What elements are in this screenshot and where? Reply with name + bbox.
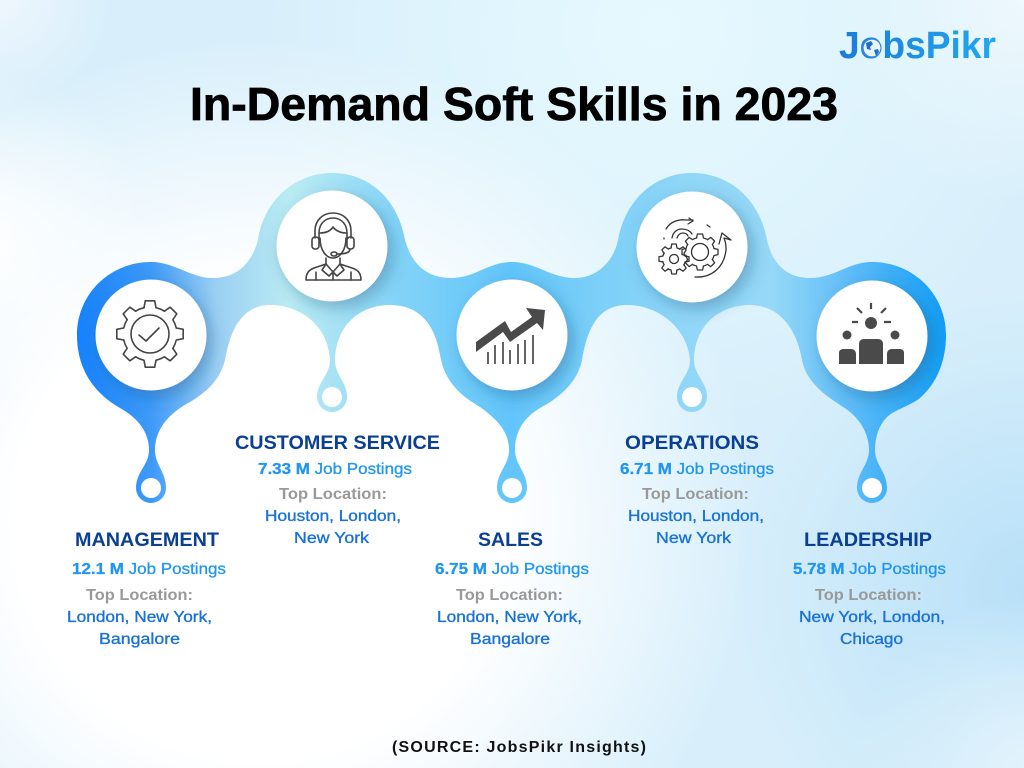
icon: customer service agent <box>306 213 361 280</box>
label: leadership: LEADERSHIP <box>804 530 932 551</box>
label: customer service: 7.33 M Job Postings <box>258 461 412 478</box>
label: customer service: Houston, London, <box>265 508 401 525</box>
pin holes <box>141 387 882 498</box>
label: operations: Top Location: <box>642 486 749 503</box>
label: management: Top Location: <box>86 587 193 604</box>
label: management: London, New York, <box>67 609 212 626</box>
label: customer service: Top Location: <box>279 486 387 503</box>
label: leadership <box>793 530 946 648</box>
white icon discs <box>96 190 928 392</box>
label: sales <box>435 530 589 648</box>
label: operations: OPERATIONS <box>625 433 759 454</box>
label: management: MANAGEMENT <box>75 530 219 551</box>
icon: gear with check <box>116 300 184 368</box>
label: sales: Bangalore <box>470 631 550 648</box>
label: leadership: 5.78 M Job Postings <box>793 561 946 578</box>
label: customer service: New York <box>294 530 369 547</box>
label: customer service: CUSTOMER SERVICE <box>235 433 440 454</box>
source note: (SOURCE: JobsPikr Insights) <box>392 739 646 756</box>
label: management: 12.1 M Job Postings <box>72 561 226 578</box>
icon: rising chart arrow <box>476 308 545 364</box>
logo: JobsPikr: JobsPikr <box>839 25 996 67</box>
label: leadership: Chicago <box>840 631 903 648</box>
ribbon timeline shape <box>77 173 946 503</box>
label: leadership: Top Location: <box>815 587 922 604</box>
label: sales: Top Location: <box>456 587 563 604</box>
title: In-Demand Soft Skills in 2023 <box>190 78 838 130</box>
label: management: Bangalore <box>99 631 180 648</box>
label: sales: SALES <box>478 530 543 551</box>
label: operations <box>620 433 774 547</box>
label: sales: 6.75 M Job Postings <box>435 561 589 578</box>
label: operations: New York <box>656 530 731 547</box>
icon: leadership team <box>839 303 904 364</box>
label: sales: London, New York, <box>437 609 582 626</box>
icon: gears with arrows <box>659 218 731 277</box>
label: operations: 6.71 M Job Postings <box>620 461 774 478</box>
label: operations: Houston, London, <box>628 508 764 525</box>
label: customer service <box>235 433 440 547</box>
label: leadership: New York, London, <box>799 609 945 626</box>
label: management <box>67 530 226 648</box>
